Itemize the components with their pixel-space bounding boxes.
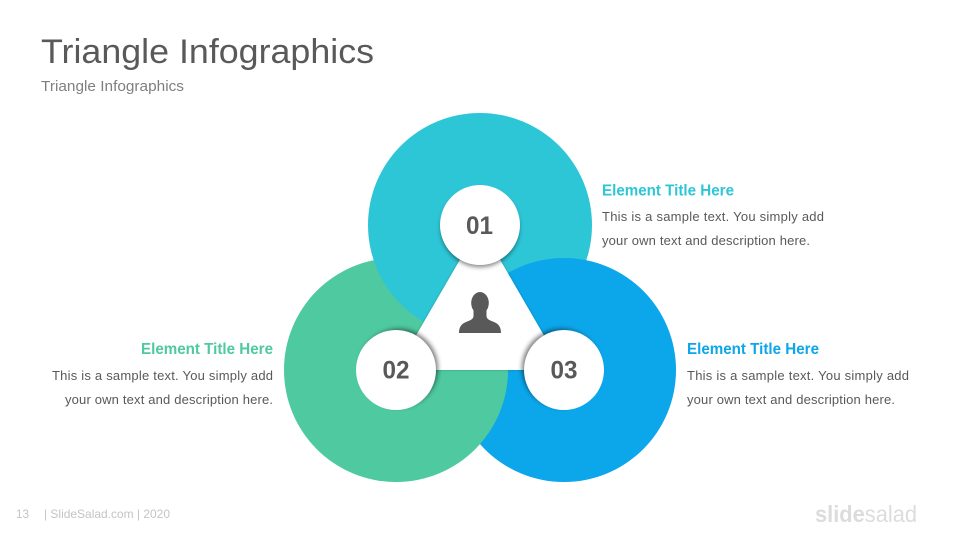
logo wordmark: slidesalad <box>815 501 917 527</box>
node 03: 03 <box>550 356 578 384</box>
node 01: 01 <box>466 212 493 240</box>
shadow: node 01 <box>441 189 519 267</box>
triangle shadow <box>396 225 564 370</box>
page number: 13 <box>16 507 29 521</box>
shadow: node 03 <box>522 329 600 407</box>
text block: element 03: Element Title Here <box>687 341 819 358</box>
text block: element 03: This is a sample text. You simply add <box>687 368 909 383</box>
text block: element 03: your own text and description here. <box>687 392 895 407</box>
footer text: | SlideSalad.com | 2020 <box>44 507 170 521</box>
node 02 <box>356 330 436 410</box>
shadow: node 02 <box>360 329 438 407</box>
text block: element 02 <box>52 341 273 407</box>
text block: element 02: This is a sample text. You simply add <box>52 368 273 383</box>
overlapping circles diagram <box>284 113 676 482</box>
title: Triangle Infographics <box>41 33 374 71</box>
text block: element 02: your own text and description here. <box>65 392 273 407</box>
node 03 <box>524 330 604 410</box>
icon: person <box>459 292 501 333</box>
text block: element 01: This is a sample text. You simply add <box>602 209 824 224</box>
text block: element 03 <box>687 341 909 407</box>
text block: element 01: your own text and description here. <box>602 233 810 248</box>
text block: element 01: Element Title Here <box>602 182 734 200</box>
circle: blue <box>452 258 676 482</box>
subtitle: Triangle Infographics <box>41 79 184 95</box>
teal overlap above green <box>374 258 452 322</box>
central white triangle <box>396 225 564 370</box>
node 02: 02 <box>382 356 410 384</box>
circle: teal <box>368 113 592 337</box>
text block: element 02: Element Title Here <box>141 341 273 358</box>
circle: green <box>284 258 508 482</box>
text block: element 01 <box>602 182 824 248</box>
node 01 <box>440 185 520 265</box>
